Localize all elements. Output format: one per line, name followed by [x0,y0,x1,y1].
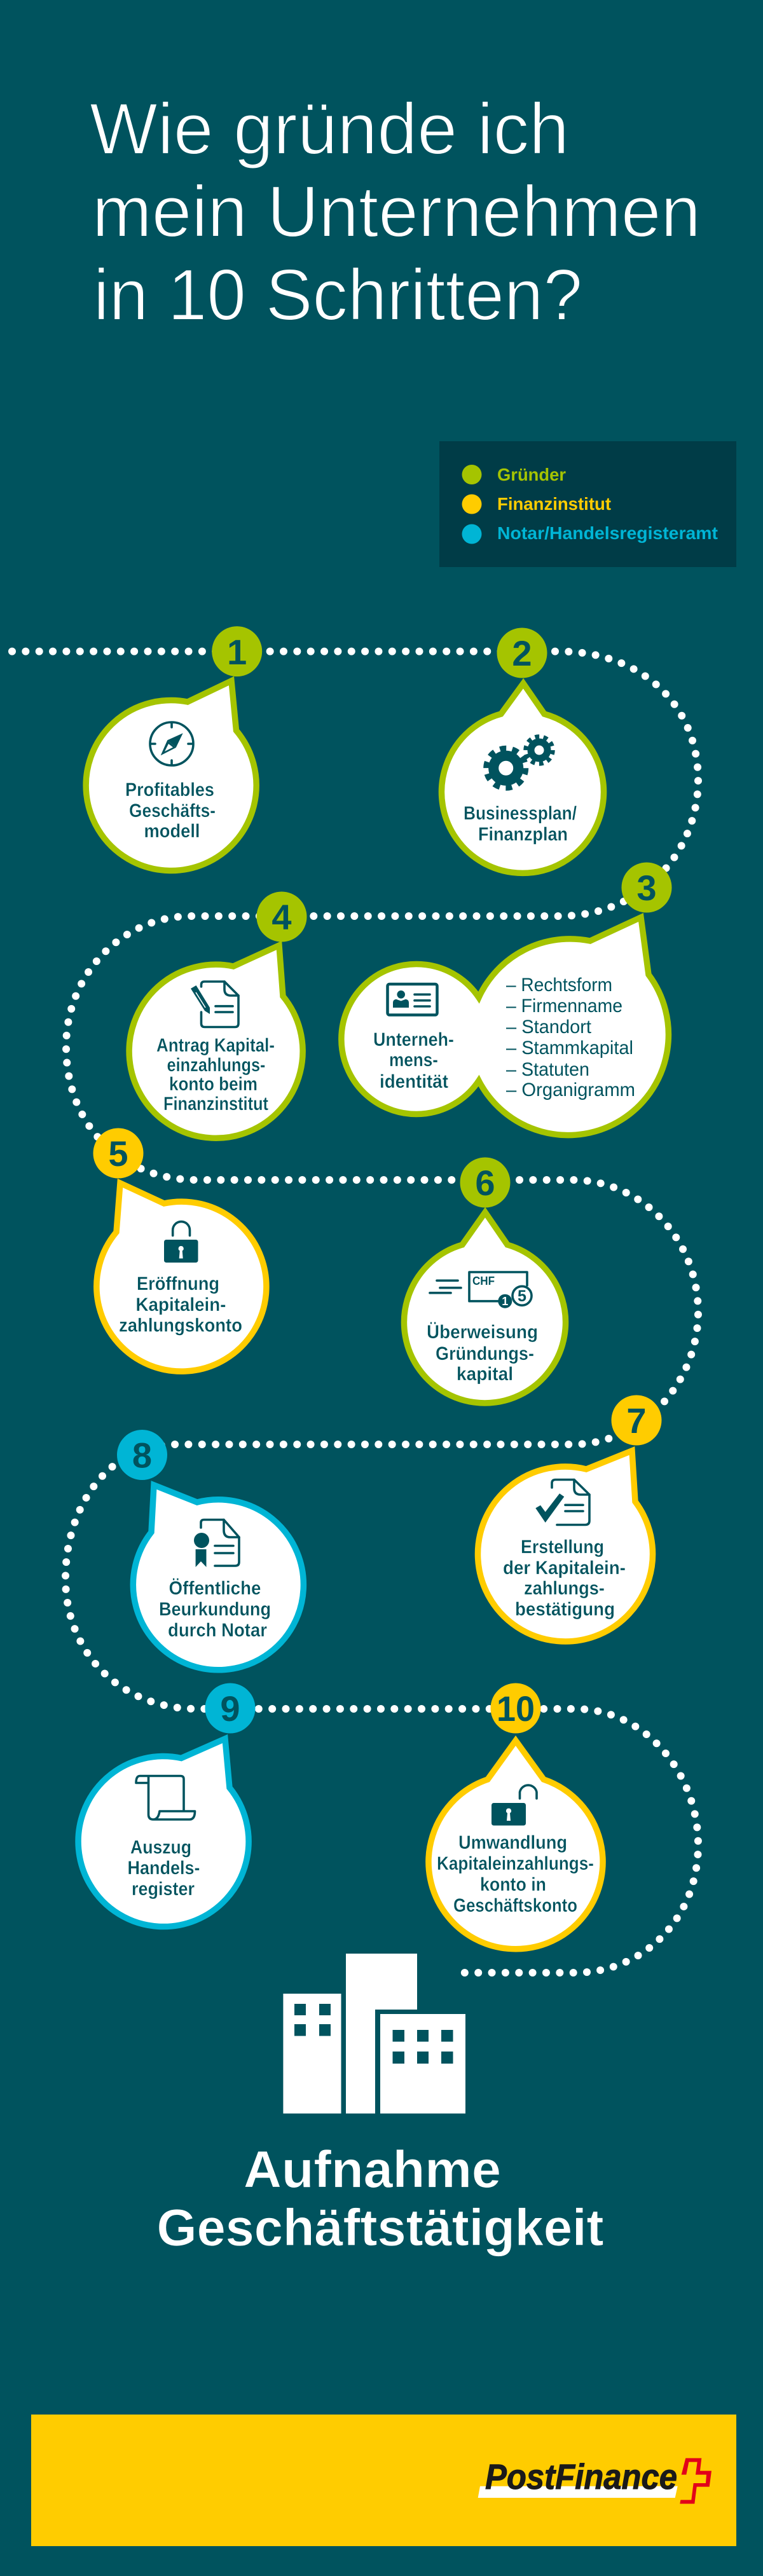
step 4: Antrag Kapitaleinzahlungskonto [129,945,303,1138]
icon: money transfer: CHF [472,1275,495,1287]
label: Businessplan/ [464,803,577,824]
badge 4: 4 [272,897,292,937]
legend [439,441,736,567]
list: – Stammkapital [506,1038,633,1058]
icon: certificate [194,1519,239,1567]
badge 8 [117,1430,167,1480]
icon: compass [150,722,193,765]
badge 6: 6 [475,1163,495,1203]
icon: id card [388,984,437,1015]
list [506,975,635,1100]
list: – Standort [506,1017,592,1038]
label: modell [144,821,200,842]
label: zahlungs- [524,1578,605,1599]
label: der Kapitalein- [503,1558,626,1579]
list: – Firmenname [506,996,622,1017]
legend: Notar/Handelsregisteramt [497,523,718,543]
dotted path [12,652,698,1973]
step 8: Öffentliche Beurkundung [133,1485,303,1670]
list: – Statuten [506,1059,589,1080]
legend: Gründer [497,465,566,484]
label [119,1273,242,1336]
label: kapital [457,1364,513,1385]
icon: gears [486,736,553,788]
label [156,1035,275,1114]
legend: Finanzinstitut [497,494,611,514]
step 6: Überweisung Gründungskapital [404,1212,566,1403]
label: Geschäfts- [129,800,216,821]
label: Erstellung [521,1537,604,1558]
badge 9: 9 [220,1689,240,1729]
label: Umwandlung [458,1832,567,1853]
badge 9 [205,1683,256,1733]
icon: document with check [535,1480,589,1524]
step 9: Auszug Handelsregister [78,1739,249,1927]
title: mein Unternehmen [92,172,701,252]
list: – Rechtsform [506,975,612,996]
label: Überweisung [427,1322,538,1343]
title: Wie gründe ich [90,89,569,170]
label [127,1837,200,1900]
badge 3 [622,862,671,913]
badge 2: 2 [512,633,532,673]
step 10: Umwandlung in Geschäftskonto [429,1741,603,1949]
step 3: Unternehmensidentität [341,917,668,1135]
label: einzahlungs- [167,1055,266,1076]
label: Auszug [130,1837,191,1858]
badge 5 [93,1128,144,1179]
badge 8: 8 [132,1435,152,1475]
label: durch Notar [168,1620,267,1641]
label [427,1322,538,1385]
badge 4 [257,891,306,942]
label [125,779,216,842]
step 7: Erstellung Kapitaleinzahlungsbestätigung [478,1451,652,1641]
label: Kapitalein- [136,1294,226,1315]
label: konto beim [169,1074,258,1095]
badge 3: 3 [636,868,657,908]
badge 7 [612,1395,661,1446]
label: mens- [389,1050,438,1071]
label [503,1537,626,1620]
icon: money transfer [430,1272,532,1308]
icon: open lock [491,1785,537,1826]
label: Öffentliche [169,1578,261,1599]
step 5: Eröffnung Kapitaleinzahlungskonto [97,1183,266,1371]
badge 5: 5 [108,1134,128,1174]
label: Profitables [125,779,214,800]
label [437,1832,594,1916]
icon: document with pen [191,982,238,1027]
step 2: Businessplan / Finanzplan [442,683,604,873]
badge 7: 7 [626,1401,647,1441]
label: Finanzplan [478,824,568,845]
heading: Aufnahme Geschäftstätigkeit [156,2141,604,2257]
badge 1: 1 [227,632,247,672]
step 1: Profitables Geschäftsmodell [86,681,256,870]
title: in 10 Schritten? [93,255,582,336]
label [464,803,577,845]
badge 1 [212,626,262,676]
label: Unterneh- [373,1029,454,1050]
label [159,1578,271,1641]
label: Geschäftskonto [453,1895,577,1916]
label: Finanzinstitut [163,1093,268,1114]
label: Handels- [127,1858,200,1879]
label: Kapitaleinzahlungs- [437,1853,594,1874]
badge 10: 10 [497,1689,535,1729]
badge 2 [497,628,547,678]
heading: Aufnahme Geschäftstätigkeit: Aufnahme [244,2141,501,2198]
logo: PostFinance: PostFinance [485,2456,677,2497]
title [90,89,701,336]
footer bar [31,2415,736,2546]
label: Antrag Kapital- [156,1035,275,1056]
badge 10 [491,1683,540,1733]
label: register [132,1879,195,1900]
icon: buildings [283,1954,465,2113]
label: Eröffnung [137,1273,219,1294]
label: Beurkundung [159,1599,271,1620]
icon: money transfer: 5 [518,1287,526,1305]
heading: Aufnahme Geschäftstätigkeit: Geschäftstätigkeit [156,2199,604,2257]
icon: scroll [136,1776,195,1819]
label: zahlungskonto [119,1315,242,1336]
list: – Organigramm [506,1079,635,1100]
icon: closed lock [164,1222,198,1263]
icon: money transfer: 1 [502,1295,508,1308]
label: identität [380,1071,448,1092]
badge 6 [460,1157,510,1208]
label: konto in [480,1874,546,1895]
label: Gründungs- [436,1343,534,1364]
label: bestätigung [515,1599,615,1620]
label [373,1029,454,1092]
